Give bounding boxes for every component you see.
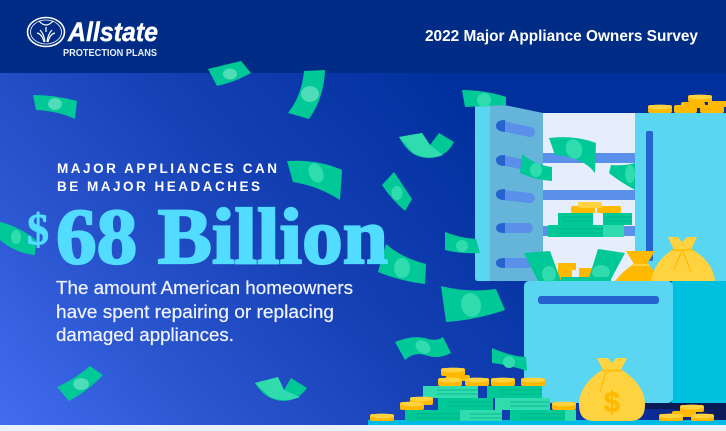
big stat: $68 Billion: 68 Billion: [56, 194, 388, 281]
floor: [368, 420, 726, 425]
yellow money bag in fridge: [651, 237, 715, 281]
bill: [382, 172, 412, 211]
freezer drawer: [524, 281, 726, 420]
bill: [57, 366, 103, 401]
bill: [255, 377, 307, 401]
coins at right: [659, 405, 714, 421]
bill: [33, 95, 77, 119]
bill: [395, 337, 451, 360]
survey title: 2022 Major Appliance Owners Survey: [425, 28, 698, 45]
money pile on floor: [370, 368, 576, 421]
description: The amount American homeowners: [56, 278, 353, 298]
header band: [0, 0, 726, 73]
headline: major appliances: MAJOR APPLIANCES CAN: [57, 161, 277, 176]
large money bag: [579, 358, 645, 421]
refrigerator: [475, 100, 726, 281]
money bills falling: [0, 61, 635, 401]
bill: [0, 222, 36, 255]
bill: [208, 61, 251, 86]
bill in fridge: [609, 163, 635, 190]
description: [56, 278, 353, 345]
fridge handle: [646, 131, 653, 261]
coins on top of fridge: [648, 95, 726, 113]
bill: [399, 133, 454, 158]
logo: Allstate Protection Plans: Allstate: [67, 17, 158, 47]
logo: Allstate Protection Plans: PROTECTION PLANS: [63, 47, 157, 59]
headline: major appliances: BE MAJOR HEADACHES: [57, 179, 260, 194]
description: damaged appliances.: [56, 325, 234, 345]
bill: [441, 286, 505, 322]
bills spilling from fridge: [524, 249, 625, 282]
fridge interior: [543, 113, 635, 281]
bill in fridge: [549, 137, 596, 173]
bottom strip: [0, 425, 726, 431]
bill: [492, 348, 527, 371]
logo: Allstate Protection Plans: [28, 17, 158, 59]
big stat: $68 Billion: $: [27, 205, 49, 254]
orange money bag and coins in fridge: [558, 251, 657, 281]
bill: [445, 232, 480, 253]
fridge shelves: [543, 153, 635, 236]
cash on fridge shelf: [548, 202, 632, 237]
gold coins: [370, 368, 576, 421]
open fridge door: [475, 100, 543, 281]
bill: [288, 70, 325, 119]
bill: [378, 244, 426, 284]
description: have spent repairing or replacing: [56, 302, 334, 322]
cash stacks: [405, 386, 576, 421]
drawer handle: [538, 296, 659, 304]
bill: [462, 90, 506, 107]
fridge body right: [635, 113, 726, 281]
headline: major appliances: [57, 161, 277, 194]
bill in fridge: [520, 154, 552, 181]
large money bag: $: [604, 387, 620, 419]
bill: [287, 161, 342, 200]
